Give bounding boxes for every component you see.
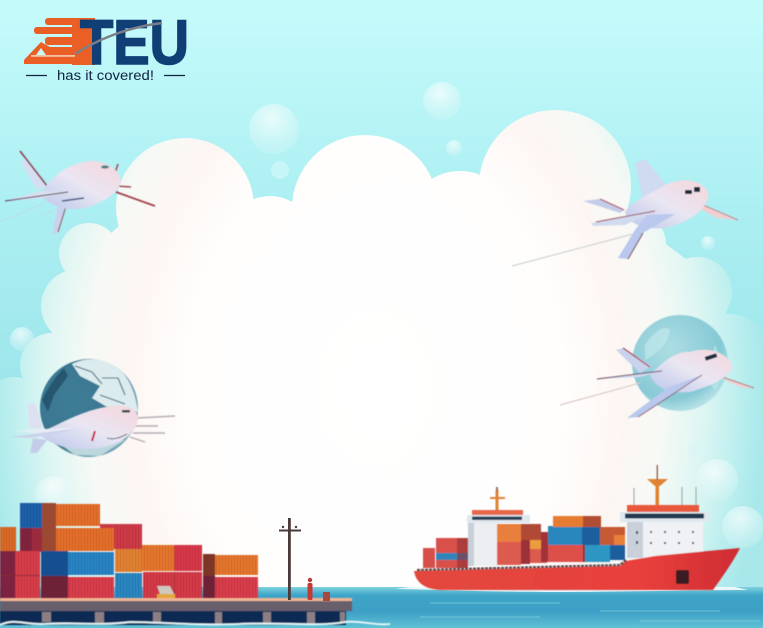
container: red mid lower bbox=[143, 572, 202, 599]
plane: left bbox=[9, 403, 175, 453]
container: blue top bbox=[20, 503, 43, 528]
logo: TEU wordmark: TEU bbox=[80, 8, 189, 78]
cargo ship bbox=[414, 465, 740, 590]
bubbles bbox=[10, 82, 715, 351]
container: left red stack bbox=[0, 551, 40, 600]
globe: left bbox=[40, 359, 138, 457]
globe: right bbox=[632, 315, 728, 411]
logo: orange truck mark bbox=[24, 18, 95, 65]
plane: right bbox=[560, 348, 754, 418]
container: upper red bbox=[100, 524, 142, 549]
deck rail bbox=[417, 560, 626, 570]
container: red right bbox=[203, 576, 258, 599]
dock pillars bbox=[42, 612, 345, 624]
container: red mid bbox=[174, 545, 202, 571]
foam along dock bbox=[0, 622, 390, 625]
container: red lower bbox=[41, 576, 114, 600]
bucket bbox=[323, 592, 330, 601]
lamp post bbox=[279, 518, 301, 600]
lower bubbles bbox=[35, 161, 763, 548]
small cart bbox=[157, 586, 175, 600]
plane: top right bbox=[512, 159, 738, 266]
logo: swoosh bbox=[75, 23, 162, 54]
container: orange mid bbox=[142, 545, 174, 571]
plane: top left bbox=[0, 151, 155, 235]
container: orange left bbox=[0, 527, 16, 551]
wake and water highlights bbox=[395, 587, 760, 621]
container: maroon bbox=[20, 528, 43, 552]
forward superstructure bbox=[620, 505, 709, 558]
container: orange right bbox=[203, 554, 258, 576]
central cloud mass bbox=[0, 110, 763, 590]
container: orange narrow bbox=[115, 549, 142, 572]
logo bbox=[24, 8, 189, 83]
logo: tagline dashes bbox=[26, 74, 185, 76]
container stacks on dock bbox=[0, 503, 258, 600]
ship containers bbox=[423, 516, 625, 568]
container: top orange bbox=[42, 503, 100, 527]
logo: tagline: has it covered! bbox=[57, 68, 154, 83]
dock worker bbox=[308, 578, 312, 600]
container: blue narrow bbox=[115, 573, 142, 600]
aft mast bbox=[490, 487, 505, 510]
anchor port bbox=[676, 570, 689, 584]
forward mast bbox=[634, 465, 696, 505]
container: second orange bbox=[42, 527, 114, 551]
aft superstructure bbox=[467, 510, 530, 566]
water bbox=[0, 587, 763, 628]
dock bbox=[0, 598, 390, 625]
container: blue middle bbox=[41, 551, 114, 576]
hull bbox=[414, 548, 740, 590]
